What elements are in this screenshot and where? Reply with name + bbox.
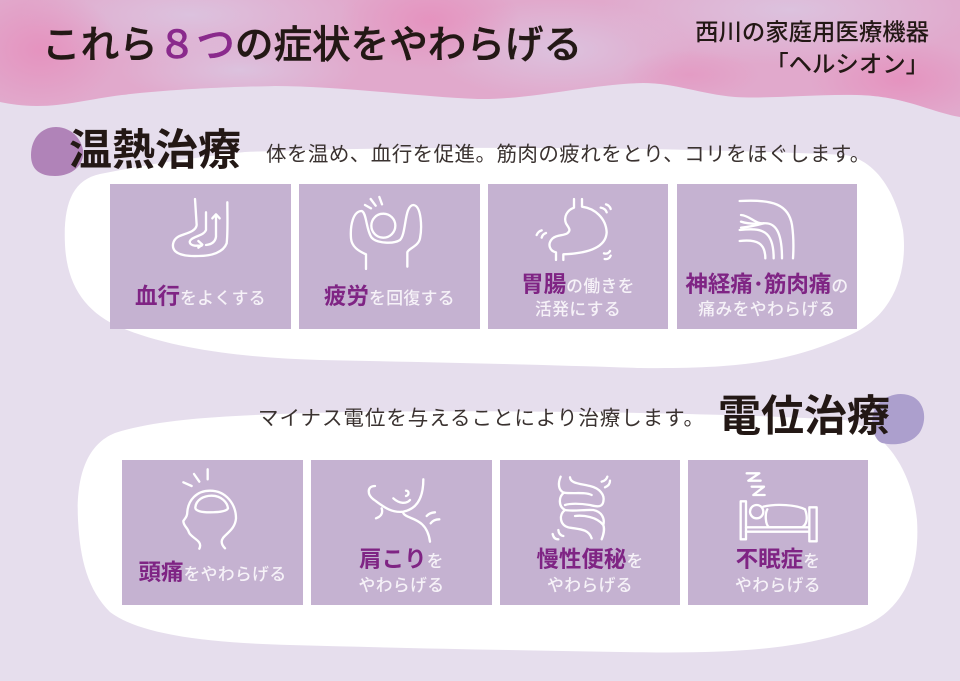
label: 血行をよくする [135, 284, 266, 309]
card: stiff shoulders [311, 460, 492, 605]
label: 神経痛･筋肉痛の [685, 272, 849, 297]
icon: stomach [536, 198, 612, 262]
icon: nerves [738, 200, 795, 260]
icon: person stretching [350, 196, 422, 270]
card: blood flow [110, 184, 291, 329]
heading: electric therapy: 電位治療 [718, 393, 890, 441]
icon: foot with arrows [172, 198, 229, 258]
description: thermal therapy: 体を温め、血行を促進。筋肉の疲れをとり、コリをほぐします。 [266, 143, 871, 166]
label: 肩こりを [359, 547, 444, 572]
brand name [695, 19, 929, 77]
description: electric therapy: マイナス電位を与えることにより治療します。 [258, 407, 705, 430]
brand name: 「ヘルシオン」 [765, 51, 929, 77]
card: headache [122, 460, 303, 605]
icon: neck and shoulder [368, 478, 440, 543]
label line 2: 活発にする [535, 300, 621, 319]
label: 慢性便秘を [536, 547, 644, 572]
icon: person sleeping in bed [740, 472, 818, 542]
label: 疲労を回復する [324, 284, 455, 309]
icon: head [182, 468, 238, 550]
brand name: 西川の家庭用医療機器 [695, 19, 929, 45]
accent blob: electric [872, 394, 924, 444]
white panel: electric potential therapy [78, 411, 917, 652]
label: 胃腸の働きを [521, 272, 635, 297]
label line 2: やわらげる [359, 576, 444, 595]
label: 不眠症を [736, 547, 820, 572]
card: nerve and muscle pain [677, 184, 857, 329]
label line 2: やわらげる [547, 576, 633, 595]
card: constipation [500, 460, 680, 605]
label line 2: やわらげる [735, 576, 821, 595]
card: stomach and intestines [488, 184, 668, 329]
card: insomnia [688, 460, 868, 605]
label line 2: 痛みをやわらげる [698, 300, 836, 319]
white panel: thermal therapy [65, 148, 904, 368]
icon: intestines [552, 476, 612, 540]
header band [0, 0, 960, 120]
accent blob: thermal [31, 127, 83, 176]
label: 頭痛をやわらげる [138, 560, 287, 585]
card: fatigue [299, 184, 480, 329]
heading: thermal therapy: 温熱治療 [69, 127, 241, 175]
title: これら８つの症状をやわらげる [42, 24, 582, 67]
